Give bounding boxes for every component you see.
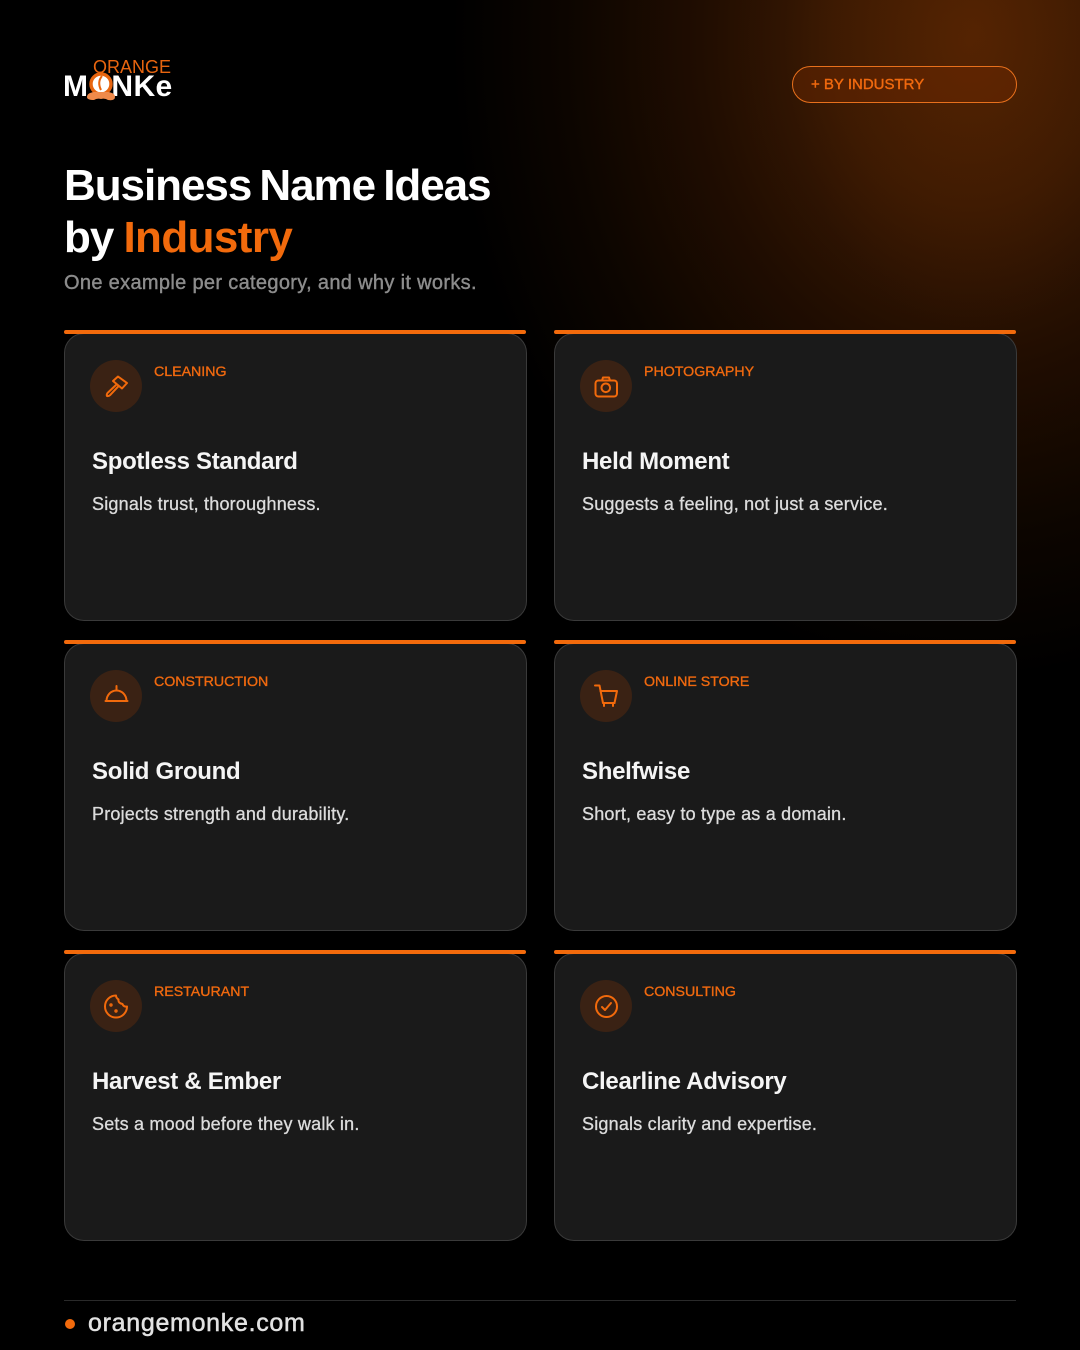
category label: CLEANING (154, 364, 227, 380)
footer (65, 1309, 306, 1337)
title: by Industry (64, 213, 292, 262)
business name: Held Moment (582, 448, 729, 475)
business name: Solid Ground (92, 758, 240, 785)
logo wordmark monke: M NKe (63, 70, 173, 103)
panel: construction (64, 640, 527, 931)
icon: cloche (90, 670, 142, 722)
pill label: + BY INDUSTRY (811, 76, 924, 93)
logo wordmark orange: ORANGE (93, 57, 171, 77)
logo monkey figure (87, 72, 115, 100)
subtitle: One example per category, and why it works. (64, 272, 477, 294)
reason: Projects strength and durability. (92, 804, 349, 824)
reason: Sets a mood before they walk in. (92, 1114, 360, 1134)
reason: Suggests a feeling, not just a service. (582, 494, 888, 514)
logo (63, 57, 173, 103)
panel: restaurant (64, 950, 527, 1241)
category label: CONSTRUCTION (154, 674, 268, 690)
reason: Signals trust, thoroughness. (92, 494, 321, 514)
panel: photography (554, 330, 1017, 621)
category label: RESTAURANT (154, 984, 249, 1000)
icon: hammer (90, 360, 142, 412)
title: Business Name Ideas (64, 161, 490, 210)
business name: Shelfwise (582, 758, 690, 785)
title (64, 161, 490, 262)
icon: check circle (580, 980, 632, 1032)
business name: Clearline Advisory (582, 1068, 786, 1095)
icon: camera (580, 360, 632, 412)
icon: cart (580, 670, 632, 722)
category label: PHOTOGRAPHY (644, 364, 754, 380)
panel: online store (554, 640, 1017, 931)
industry pill (792, 66, 1017, 103)
footer url: orangemonke.com (88, 1309, 306, 1337)
category label: ONLINE STORE (644, 674, 749, 690)
footer dot (65, 1319, 75, 1329)
reason: Short, easy to type as a domain. (582, 804, 847, 824)
business name: Harvest & Ember (92, 1068, 281, 1095)
panel: cleaning (64, 330, 527, 621)
icon: cookie (90, 980, 142, 1032)
reason: Signals clarity and expertise. (582, 1114, 817, 1134)
panel: consulting (554, 950, 1017, 1241)
category label: CONSULTING (644, 984, 736, 1000)
business name: Spotless Standard (92, 448, 298, 475)
